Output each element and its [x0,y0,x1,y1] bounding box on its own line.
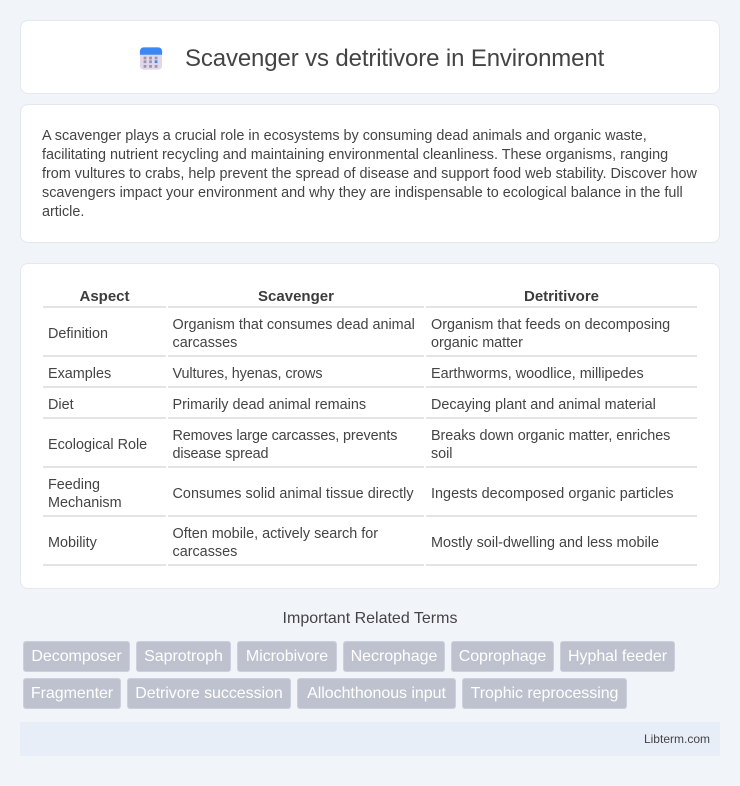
text: intro: article. [42,204,84,220]
row: mobility [48,526,659,560]
row: ecological role: Breaks down organic matter, enriches [431,428,670,444]
heading: related terms: Important Related Terms [283,610,457,627]
row: definition: Organism that consumes dead animal [172,317,415,333]
panel: title card [20,20,720,94]
table header [79,288,599,305]
tags: related terms [23,641,675,709]
table header: Aspect [79,288,130,305]
table header: Detritivore [524,288,599,305]
row: definition [48,317,670,351]
text: intro: from vultures to crabs, help prevent the spread of disease and support food web stability. Discover how [42,166,697,182]
panel: comparison table [20,263,720,589]
row: examples [48,366,644,382]
tags: related terms: Necrophage [351,648,437,665]
row: feeding mechanism: Mechanism [48,495,122,511]
title: Scavenger vs detritivore in Environment [185,45,604,72]
tags: related terms: Fragmenter [31,685,113,702]
row: ecological role: Removes large carcasses, prevents [172,428,397,444]
row: examples: Earthworms, woodlice, millipedes [431,366,644,382]
row: mobility: Often mobile, actively search for [172,526,378,542]
row: diet: Decaying plant and animal material [431,397,656,413]
text: intro: facilitating nutrient recycling and maintaining environmental cleanliness. These organisms, ranging [42,147,668,163]
row: mobility: carcasses [172,544,237,560]
text: intro: scavengers impact your environment and why they are indispensable to ecological balance in the full [42,185,683,201]
row: definition: carcasses [172,335,237,351]
tags: related terms: Saprotroph [144,648,223,665]
tags: related terms: Hyphal feeder [568,648,667,665]
row: definition: organic matter [431,335,523,351]
table rules [43,306,697,566]
row: definition: Organism that feeds on decomposing [431,317,670,333]
tags: related terms: Coprophage [459,648,546,665]
tags: related terms: Detrivore succession [135,685,283,702]
icon: calendar [140,47,162,70]
text: intro: A scavenger plays a crucial role in ecosystems by consuming dead animals and organic waste, [42,128,647,144]
row: diet: Primarily dead animal remains [172,397,366,413]
row: feeding mechanism: Feeding [48,477,100,493]
tags: related terms: Trophic reprocessing [471,685,618,702]
row: ecological role: soil [431,446,452,462]
row: ecological role [48,428,670,462]
table header: Scavenger [258,288,334,305]
row: feeding mechanism: Ingests decomposed organic particles [431,486,674,502]
row: diet: Diet [48,397,74,413]
row: mobility: Mostly soil-dwelling and less mobile [431,535,659,551]
row: feeding mechanism [48,477,674,511]
row: ecological role: disease spread [172,446,268,462]
footer [20,722,720,756]
tags: related terms: Microbivore [246,648,328,665]
tags: related terms: Allochthonous input [307,685,446,702]
row: definition: Definition [48,326,108,342]
text: intro [42,128,697,220]
row: diet [48,397,656,413]
row: mobility: Mobility [48,535,97,551]
row: feeding mechanism: Consumes solid animal tissue directly [172,486,414,502]
footer credit: Libterm.com [644,732,710,746]
row: examples: Examples [48,366,111,382]
row: ecological role: Ecological Role [48,437,147,453]
tags: related terms: Decomposer [31,648,122,665]
row: examples: Vultures, hyenas, crows [172,366,322,382]
panel: intro paragraph [20,104,720,243]
